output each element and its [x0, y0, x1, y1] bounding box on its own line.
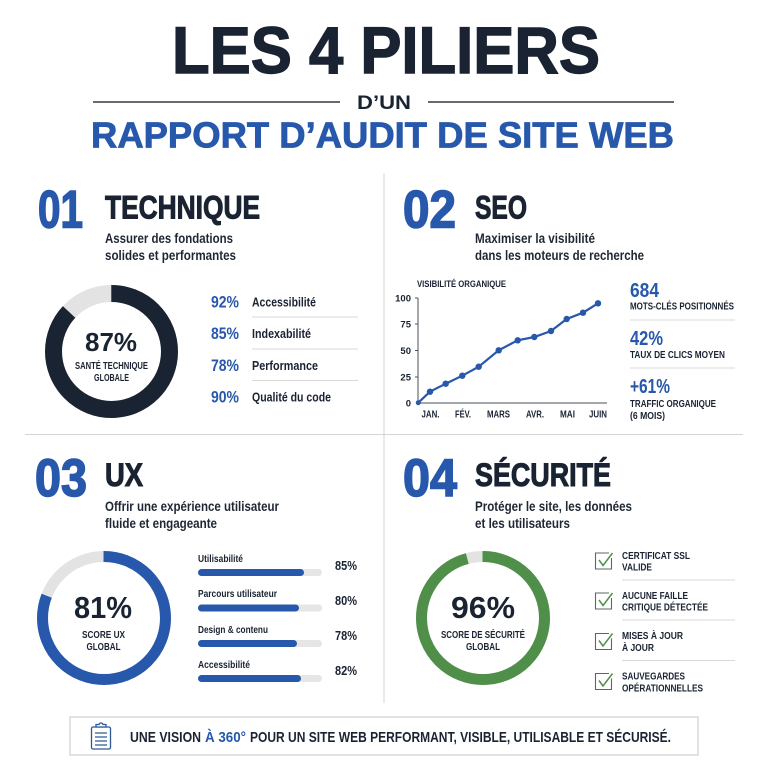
metric list: technique: 92%: [211, 292, 239, 312]
heading: ux: UX: [105, 457, 144, 493]
subtitle: sécurité: et les utilisateurs: [475, 515, 570, 531]
section number 02: 02: [403, 180, 456, 240]
key figures: seo: 684: [630, 280, 660, 302]
line chart: visibilité organique: FÉV.: [455, 408, 471, 420]
donut chart: 87%: 87%: [85, 327, 137, 357]
bar chart: ux metrics: Utilisabilité: [198, 553, 243, 565]
bar chart: ux metrics: Parcours utilisateur: [198, 588, 277, 600]
bar chart: ux metrics: Accessibilité: [198, 659, 250, 671]
heading: technique: TECHNIQUE: [105, 190, 260, 226]
metric list: technique: Qualité du code: [252, 390, 331, 404]
bar chart: ux metrics: 85%: [335, 558, 357, 573]
section number 03: 03: [35, 449, 87, 508]
line chart: visibilité organique: 50: [400, 346, 411, 357]
subtitle: ux: [105, 498, 279, 531]
section number 01: 01: [38, 180, 83, 240]
metric list: technique: 78%: [211, 356, 239, 375]
subtitle: seo: dans les moteurs de recherche: [475, 247, 644, 263]
donut chart: 81%: SCORE UX: [82, 629, 125, 641]
title: RAPPORT D’AUDIT DE SITE WEB: [91, 114, 674, 156]
line chart: visibilité organique: 0: [406, 398, 411, 410]
title: D’UN: [357, 93, 411, 114]
panel: sécurité: [403, 449, 735, 694]
title: LES 4 PILIERS: [172, 13, 600, 87]
metric list: technique: Indexabilité: [252, 326, 311, 341]
metric list: technique: Performance: [252, 358, 318, 373]
line chart: visibilité organique: VISIBILITÉ ORGANIQUE: [417, 279, 506, 290]
donut chart: 96%: [422, 556, 544, 680]
subtitle: technique: solides et performantes: [105, 247, 236, 263]
check item: mises à jour: MISES À JOUR: [622, 629, 683, 642]
metric list: technique: Accessibilité: [252, 294, 316, 310]
line chart: visibilité organique: 100: [395, 294, 411, 304]
section number 04: 04: [403, 449, 457, 508]
banner text: UNE VISION: [130, 729, 201, 746]
donut chart: 96%: SCORE DE SÉCURITÉ: [441, 628, 525, 641]
bar chart: ux metrics: 78%: [335, 628, 357, 643]
key figures: seo: TAUX DE CLICS MOYEN: [630, 349, 725, 361]
banner text: POUR UN SITE WEB PERFORMANT, VISIBLE, UTILISABLE ET SÉCURISÉ.: [250, 729, 671, 746]
subtitle: technique: Assurer des fondations: [105, 230, 233, 246]
subtitle: ux: Offrir une expérience utilisateur: [105, 498, 279, 514]
line chart: visibilité organique: JAN.: [422, 410, 440, 420]
metric list: technique: 90%: [211, 388, 239, 406]
line chart: visibilité organique: 75: [400, 320, 412, 330]
banner text: À 360°: [205, 729, 246, 746]
line chart: visibilité organique: MARS: [487, 410, 510, 420]
key figures: seo: +61%: [630, 376, 670, 398]
check item: certificat SSL: CERTIFICAT SSL: [622, 550, 690, 562]
check item: sauvegardes: SAUVEGARDES: [622, 670, 685, 682]
donut chart: 87%: SANTÉ TECHNIQUE: [75, 359, 148, 372]
donut chart: 96%: GLOBAL: [466, 641, 500, 653]
check item: aucune faille: AUCUNE FAILLE: [622, 590, 688, 602]
checklist: sécurité: [596, 550, 735, 694]
bar chart: ux metrics: Design & contenu: [198, 624, 268, 636]
bar chart: ux metrics: 80%: [335, 593, 357, 608]
key figures: seo: MOTS-CLÉS POSITIONNÉS: [630, 300, 734, 312]
check item: mises à jour: À JOUR: [622, 641, 654, 654]
subtitle: seo: Maximiser la visibilité: [475, 230, 595, 246]
bar chart: ux metrics: [198, 553, 357, 682]
banner text: [130, 729, 671, 746]
key figures: seo: [630, 280, 735, 422]
bar chart: ux metrics: 82%: [335, 663, 357, 678]
line chart: visibilité organique: AVR.: [526, 410, 544, 420]
donut chart: 87%: [54, 294, 170, 410]
panel: ux: [35, 449, 357, 682]
check item: mises à jour: [596, 629, 683, 654]
callout banner: [70, 717, 698, 755]
panel: seo: [395, 180, 735, 422]
check item: sauvegardes: [596, 670, 703, 694]
line chart: visibilité organique: [395, 279, 607, 420]
line chart: visibilité organique: 25: [400, 372, 412, 384]
key figures: seo: 42%: [630, 328, 663, 350]
heading: seo: SEO: [475, 190, 527, 226]
subtitle: seo: [475, 230, 644, 263]
check item: aucune faille: [596, 590, 708, 614]
panel: technique: [38, 180, 358, 410]
check item: certificat SSL: [596, 550, 690, 574]
subtitle: technique: [105, 230, 236, 263]
donut chart: 81%: GLOBAL: [86, 641, 121, 653]
heading: sécurité: SÉCURITÉ: [475, 457, 611, 493]
check item: sauvegardes: OPÉRATIONNELLES: [622, 682, 703, 694]
key figures: seo: TRAFFIC ORGANIQUE: [630, 398, 716, 410]
subtitle: sécurité: [475, 498, 632, 531]
donut chart: 87%: GLOBALE: [94, 372, 129, 384]
line chart: visibilité organique: JUIN: [589, 410, 607, 420]
subtitle: ux: fluide et engageante: [105, 515, 217, 531]
key figures: seo: (6 MOIS): [630, 410, 665, 422]
donut chart: 81%: 81%: [74, 590, 132, 625]
donut chart: 81%: [42, 556, 166, 680]
metric list: technique: [211, 292, 358, 406]
line chart: visibilité organique: MAI: [560, 410, 575, 420]
check item: certificat SSL: VALIDE: [622, 562, 652, 574]
check item: aucune faille: CRITIQUE DÉTECTÉE: [622, 600, 708, 614]
donut chart: 96%: 96%: [451, 590, 515, 625]
subtitle: sécurité: Protéger le site, les données: [475, 498, 632, 514]
icon: clipboard: [92, 723, 110, 749]
title: [91, 13, 674, 156]
metric list: technique: 85%: [211, 324, 239, 343]
